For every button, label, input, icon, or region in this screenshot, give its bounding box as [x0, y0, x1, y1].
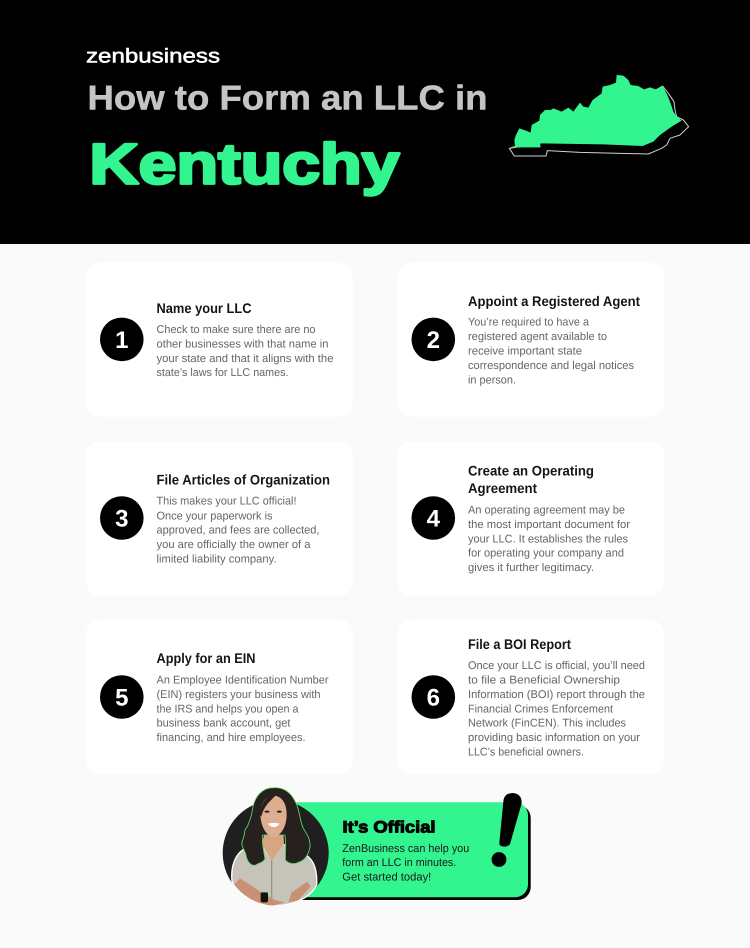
- title line: How to Form an LLC in: [88, 79, 488, 117]
- callout heading: It’s Official: [342, 818, 436, 836]
- description: approved, and fees are collected,: [156, 525, 320, 537]
- description: Information (BOI) report through the: [468, 689, 645, 701]
- description: [468, 317, 634, 386]
- description: limited liability company.: [156, 553, 276, 565]
- number badge 6: 6: [427, 685, 440, 712]
- step 5 card: [86, 620, 353, 774]
- description: registered agent available to: [468, 331, 607, 343]
- description: You’re required to have a: [468, 317, 590, 329]
- face: [260, 796, 287, 837]
- hair: [242, 788, 310, 865]
- number badge 3: 3: [115, 506, 128, 533]
- number badge 4: 4: [427, 506, 441, 533]
- heading: [468, 463, 594, 496]
- description: business bank account, get: [156, 718, 291, 730]
- callout panel: [285, 802, 531, 900]
- header banner: [0, 0, 750, 244]
- step 6 card: [397, 620, 664, 774]
- map: Kentucky: [509, 75, 689, 156]
- description: providing basic information on your: [468, 732, 640, 744]
- number badge 2: 2: [427, 327, 440, 354]
- description: receive important state: [468, 346, 582, 358]
- description: your LLC. It establishes the rules: [468, 533, 628, 545]
- description: correspondence and legal notices: [468, 360, 634, 372]
- description: to file a Beneficial Ownership: [468, 674, 620, 686]
- description: An operating agreement may be: [468, 504, 625, 516]
- watch: [261, 892, 268, 902]
- icon: exclamation mark: [492, 793, 522, 867]
- heading: Agreement: [468, 480, 537, 496]
- description: Once your paperwork is: [156, 510, 273, 522]
- step 2 card: [397, 263, 664, 417]
- shirt: [232, 844, 317, 906]
- description: Financial Crimes Enforcement: [468, 703, 614, 715]
- description: (EIN) registers your business with: [156, 689, 320, 701]
- description: Network (FinCEN). This includes: [468, 718, 626, 730]
- description: [156, 324, 334, 379]
- description: your state and that it aligns with the: [156, 353, 334, 365]
- neck: [262, 832, 284, 861]
- number badge 5: 5: [115, 685, 128, 712]
- number badge 2: [412, 318, 455, 361]
- fringe: [260, 794, 287, 817]
- heading: File a BOI Report: [468, 636, 571, 652]
- description: This makes your LLC official!: [156, 496, 296, 508]
- callout text: ZenBusiness can help you: [342, 843, 469, 855]
- description: [468, 660, 645, 758]
- callout text: form an LLC in minutes.: [342, 857, 456, 869]
- description: the most important document for: [468, 519, 630, 531]
- step 4 card: [397, 441, 664, 596]
- description: for operating your company and: [468, 548, 624, 560]
- number badge 1: 1: [115, 327, 128, 354]
- description: [156, 674, 329, 744]
- description: Once your LLC is official, you’ll need: [468, 660, 645, 672]
- heading: Appoint a Registered Agent: [468, 293, 640, 309]
- description: financing, and hire employees.: [156, 732, 306, 744]
- description: gives it further legitimacy.: [468, 562, 594, 574]
- shirt placket: [270, 860, 274, 900]
- state name: Kentuchy: [90, 132, 400, 196]
- callout text: Get started today!: [342, 872, 431, 884]
- callout text: [342, 843, 469, 884]
- number badge 4: [412, 496, 455, 540]
- number badge 5: [100, 675, 144, 719]
- heading: Apply for an EIN: [156, 650, 256, 666]
- heading: Create an Operating: [468, 463, 594, 479]
- forearms: [234, 878, 311, 906]
- number badge 6: [412, 675, 455, 719]
- description: the IRS and helps you open a: [156, 703, 299, 715]
- description: other businesses with that name in: [156, 338, 328, 350]
- description: [156, 496, 320, 565]
- heading: File Articles of Organization: [156, 471, 330, 487]
- description: An Employee Identification Number: [156, 674, 329, 686]
- description: LLC’s beneficial owners.: [468, 746, 584, 758]
- heading: Name your LLC: [156, 300, 252, 316]
- step 1 card: [86, 263, 353, 417]
- description: you are officially the owner of a: [156, 539, 311, 551]
- number badge 3: [100, 496, 144, 540]
- eyes and smile: [264, 811, 282, 827]
- portrait: woman with crossed arms: [223, 788, 329, 906]
- description: Check to make sure there are no: [156, 324, 316, 336]
- description: [468, 504, 630, 574]
- number badge 1: [100, 318, 144, 361]
- callout: It's Official: [223, 788, 531, 906]
- description: in person.: [468, 374, 516, 386]
- logo: zenbusiness: zenbusiness: [86, 45, 220, 67]
- step 3 card: [86, 441, 353, 596]
- description: state’s laws for LLC names.: [156, 367, 288, 379]
